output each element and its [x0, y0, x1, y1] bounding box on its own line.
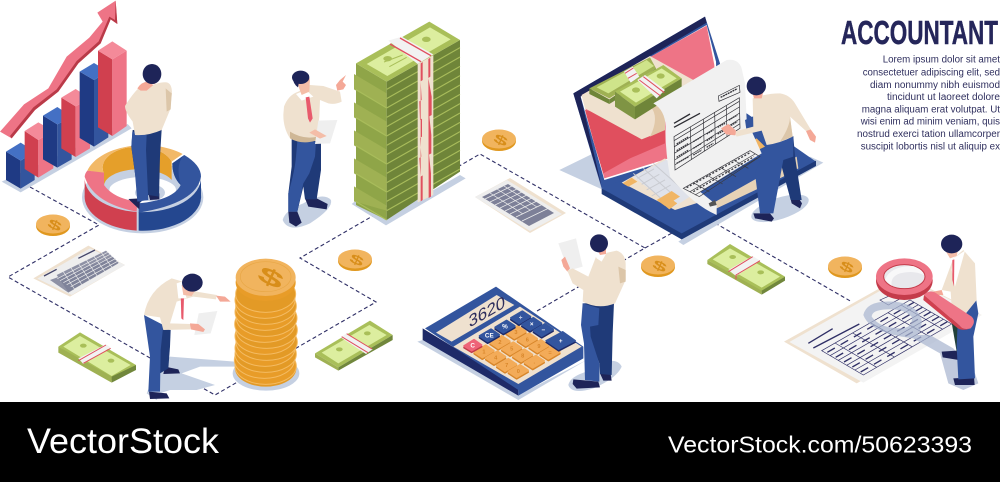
- icon: stacked gold coins: $: [254, 261, 288, 294]
- figure: man with magnifying glass: [933, 235, 978, 385]
- icon: calculator: +: [559, 338, 563, 345]
- document: large invoice: [784, 275, 982, 383]
- icon: calculator: 3620: [468, 292, 506, 332]
- icon: calculator: CE: [485, 333, 494, 340]
- figure: man pointing: [283, 71, 346, 228]
- icon: coin: [36, 214, 70, 236]
- icon: calculator: 6: [526, 337, 529, 343]
- text block: description: suscipit lobortis nisl ut aliquip ex: [861, 142, 1000, 153]
- icon: donut chart with standing man: [82, 64, 203, 233]
- text block: description: wisi enim ad minim veniam, quis: [860, 117, 1000, 128]
- icon: calculator: =: [548, 351, 552, 357]
- document: small invoice: [33, 246, 125, 297]
- icon: calculator: %: [502, 324, 508, 331]
- panel: coin stack with bent man: [33, 246, 393, 400]
- watermark image id: VectorStock.com/50623393: [668, 432, 972, 458]
- dashed flow path: [8, 154, 852, 395]
- icon: calculator: [423, 287, 583, 396]
- watermark logo text: VectorStock: [27, 422, 220, 461]
- icon: calculator: 9: [537, 344, 541, 350]
- icon: calculator: 3: [514, 330, 518, 336]
- document: long invoice: [653, 60, 798, 215]
- panel: money stack with man: [283, 22, 466, 228]
- icon: calculator: 5: [510, 346, 513, 352]
- icon: calculator: 4: [494, 355, 498, 361]
- icon: calculator: ÷: [519, 314, 523, 321]
- icon: cash bundle: [58, 332, 136, 383]
- panel: magnified document with man: [784, 235, 982, 390]
- icon: coin: [641, 256, 675, 277]
- icon: coin: $: [650, 257, 669, 276]
- icon: coin: [338, 250, 372, 271]
- icon: magnifying glass: [876, 258, 974, 330]
- icon: calculator: −: [541, 327, 545, 334]
- icon: coin: $: [45, 216, 64, 235]
- icon: calculator: 1: [482, 349, 486, 355]
- icon: coin: $: [491, 131, 510, 150]
- figure: man leaning over coins: [144, 274, 231, 399]
- text block: description: [857, 55, 1000, 153]
- icon: coin: $: [837, 258, 856, 277]
- document: small invoice upper: [475, 178, 566, 233]
- icon: coin: [482, 130, 516, 151]
- icon: keyboard: [622, 138, 765, 210]
- figure: man reading paper: [558, 234, 626, 391]
- icon: calculator: 0: [517, 369, 520, 375]
- icon: calculator: .: [534, 360, 536, 366]
- figure: man reading invoice: [721, 77, 816, 228]
- icon: calculator: ×: [530, 321, 534, 328]
- text block: description: Lorem ipsum dolor sit amet: [883, 55, 1000, 66]
- text block: description: nostrud exerci tation ullamcorper: [857, 129, 1000, 140]
- icon: stacked gold coins: [234, 259, 297, 387]
- footer: watermark bar: [0, 402, 1000, 482]
- icon: bar chart with rising arrow: [0, 1, 132, 192]
- icon: calculator: 7: [505, 363, 508, 369]
- text block: description: diam nonummy nibh euismod: [870, 80, 1000, 91]
- icon: calculator: 2: [498, 340, 502, 346]
- icon: calculator: 8: [521, 353, 524, 359]
- panel: laptop with invoice and man: [559, 17, 823, 245]
- icon: cash bundle: [707, 244, 785, 295]
- icon: calculator: C: [470, 342, 475, 349]
- icon: cash bundle: [315, 321, 393, 371]
- panel: calculator with man: [417, 234, 626, 400]
- icon: cash bundles on screen: [589, 57, 682, 119]
- text block: description: tincidunt ut laoreet dolore: [887, 92, 1000, 103]
- text block: description: magna aliquam erat volutpat. Ut: [862, 104, 1000, 115]
- icon: coin: [828, 256, 862, 278]
- figure: thinking man: [125, 64, 172, 209]
- icon: coin: $: [347, 251, 366, 270]
